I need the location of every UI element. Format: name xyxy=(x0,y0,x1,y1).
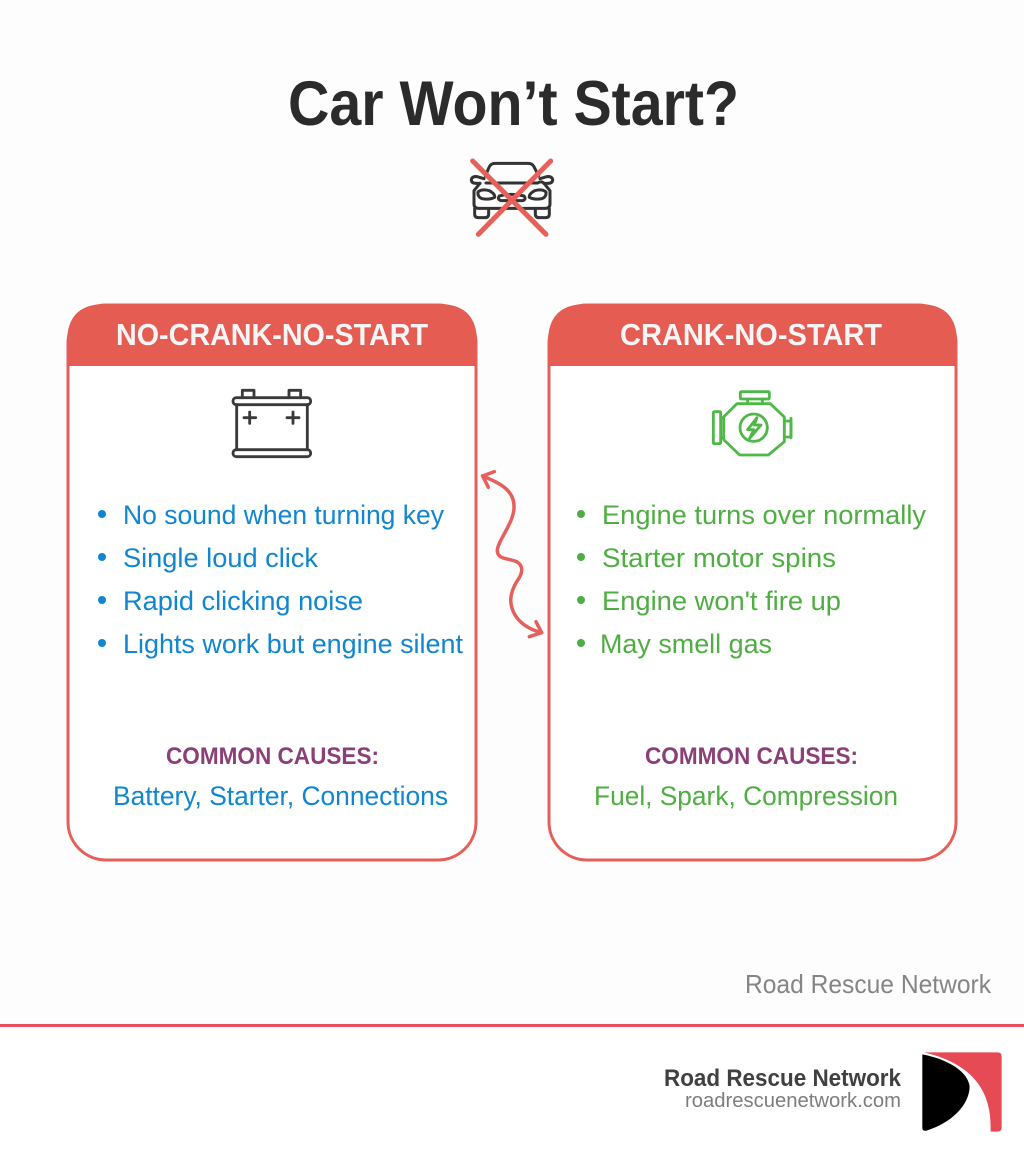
common causes label: COMMON CAUSES: xyxy=(166,743,379,770)
bullet list: No sound when turning key xyxy=(123,500,444,530)
bullet list: Lights work but engine silent xyxy=(123,629,463,659)
icon: car crossed out xyxy=(471,161,553,234)
common causes label: COMMON CAUSES: xyxy=(645,743,858,770)
bullet list: Engine won't fire up xyxy=(602,586,841,616)
panel header xyxy=(548,304,957,366)
bullet list: Starter motor spins xyxy=(602,543,836,573)
bullet list: Single loud click xyxy=(123,543,318,573)
panel: no-crank-no-start xyxy=(67,304,477,860)
bullet list: May smell gas xyxy=(600,629,772,659)
arrow: double-headed wavy connector xyxy=(483,472,542,637)
common causes: Battery, Starter, Connections xyxy=(113,781,448,811)
panel heading: NO-CRANK-NO-START xyxy=(116,317,428,352)
title: Car Won’t Start? xyxy=(288,69,739,139)
bullet list: Rapid clicking noise xyxy=(123,586,363,616)
panel: crank-no-start xyxy=(548,304,957,860)
bullet list xyxy=(98,500,463,659)
panel heading: CRANK-NO-START xyxy=(620,317,882,352)
icon: battery xyxy=(233,390,311,457)
source label: Road Rescue Network xyxy=(745,969,992,999)
panel header xyxy=(67,304,477,366)
common causes: Fuel, Spark, Compression xyxy=(594,781,898,811)
icon: engine xyxy=(713,392,791,455)
footer url: roadrescuenetwork.com xyxy=(685,1090,901,1112)
bullet list: Engine turns over normally xyxy=(602,500,927,530)
footer brand name: Road Rescue Network xyxy=(664,1065,902,1092)
footer xyxy=(0,1024,1024,1132)
logo xyxy=(922,1052,1002,1132)
bullet list xyxy=(577,500,927,659)
